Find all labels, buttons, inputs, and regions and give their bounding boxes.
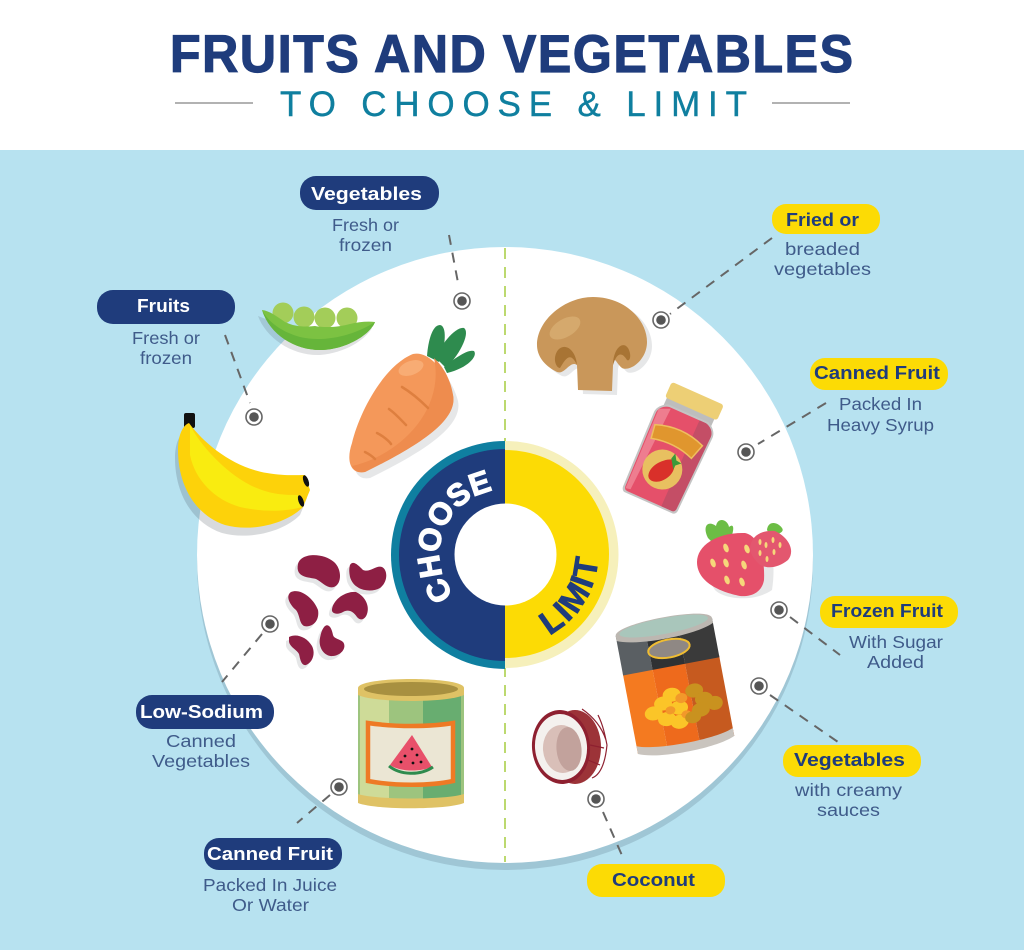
choose label: CHOOSE	[417, 470, 492, 602]
callout: vegetables with creamy sauces: sauces	[817, 800, 880, 820]
icon: jam jar	[619, 380, 727, 516]
callout: frozen fruit: Frozen Fruit	[831, 600, 943, 621]
callout: vegetables with creamy sauces	[751, 678, 921, 820]
icon: carrot	[349, 325, 475, 478]
icon: canned watermelon	[358, 679, 464, 808]
callout: vegetables with creamy sauces: with creamy	[794, 780, 902, 800]
callout: frozen fruit: Added	[867, 652, 924, 672]
icon: mushroom	[537, 297, 652, 395]
icon: banana	[175, 413, 310, 536]
callout: fried or breaded: breaded	[785, 239, 860, 259]
callout: canned fruit limit: Packed In	[839, 394, 922, 414]
callout: vegetables: Fresh or	[332, 215, 399, 235]
limit label: LIMIT	[538, 556, 598, 636]
callout: canned fruit choose: Packed In Juice	[203, 875, 337, 895]
callout: canned fruit choose: Canned Fruit	[207, 843, 333, 864]
icon: strawberries	[697, 520, 791, 598]
icon: peas	[258, 302, 375, 355]
callout: frozen fruit	[771, 596, 958, 672]
callout: frozen fruit: With Sugar	[849, 632, 943, 652]
callout: low-sodium: Vegetables	[152, 751, 250, 771]
callout: vegetables	[300, 176, 470, 309]
callout: coconut: Coconut	[612, 869, 695, 890]
subtitle: TO CHOOSE & LIMIT	[280, 85, 747, 124]
callout: fried or breaded: Fried or	[786, 209, 859, 230]
callout: fruits: frozen	[140, 348, 192, 368]
callout: fruits: Fruits	[137, 295, 190, 316]
callout: fried or breaded	[653, 204, 880, 328]
callout: fried or breaded: vegetables	[774, 259, 871, 279]
icon: kidney beans	[285, 555, 386, 669]
icon: canned corn	[614, 608, 736, 761]
callout: low-sodium: Low-Sodium	[140, 701, 263, 722]
callout: fruits: Fresh or	[132, 328, 200, 348]
callout: canned fruit choose	[203, 779, 347, 915]
title: FRUITS AND VEGETABLES	[170, 25, 853, 83]
callout: canned fruit limit	[738, 358, 948, 460]
callout: canned fruit limit: Heavy Syrup	[827, 415, 934, 435]
callout: low-sodium	[136, 616, 278, 771]
callout: canned fruit choose: Or Water	[232, 895, 309, 915]
center wheel	[391, 441, 618, 669]
callout: vegetables: frozen	[339, 235, 392, 255]
callout: coconut	[587, 791, 725, 897]
callout: vegetables with creamy sauces: Vegetables	[794, 749, 905, 770]
main plate circle	[197, 247, 813, 870]
callout: low-sodium: Canned	[166, 731, 236, 751]
callout: canned fruit limit: Canned Fruit	[814, 362, 940, 383]
callout: vegetables: Vegetables	[311, 183, 422, 204]
callout: fruits	[97, 290, 262, 425]
icon: coconut	[529, 708, 607, 786]
